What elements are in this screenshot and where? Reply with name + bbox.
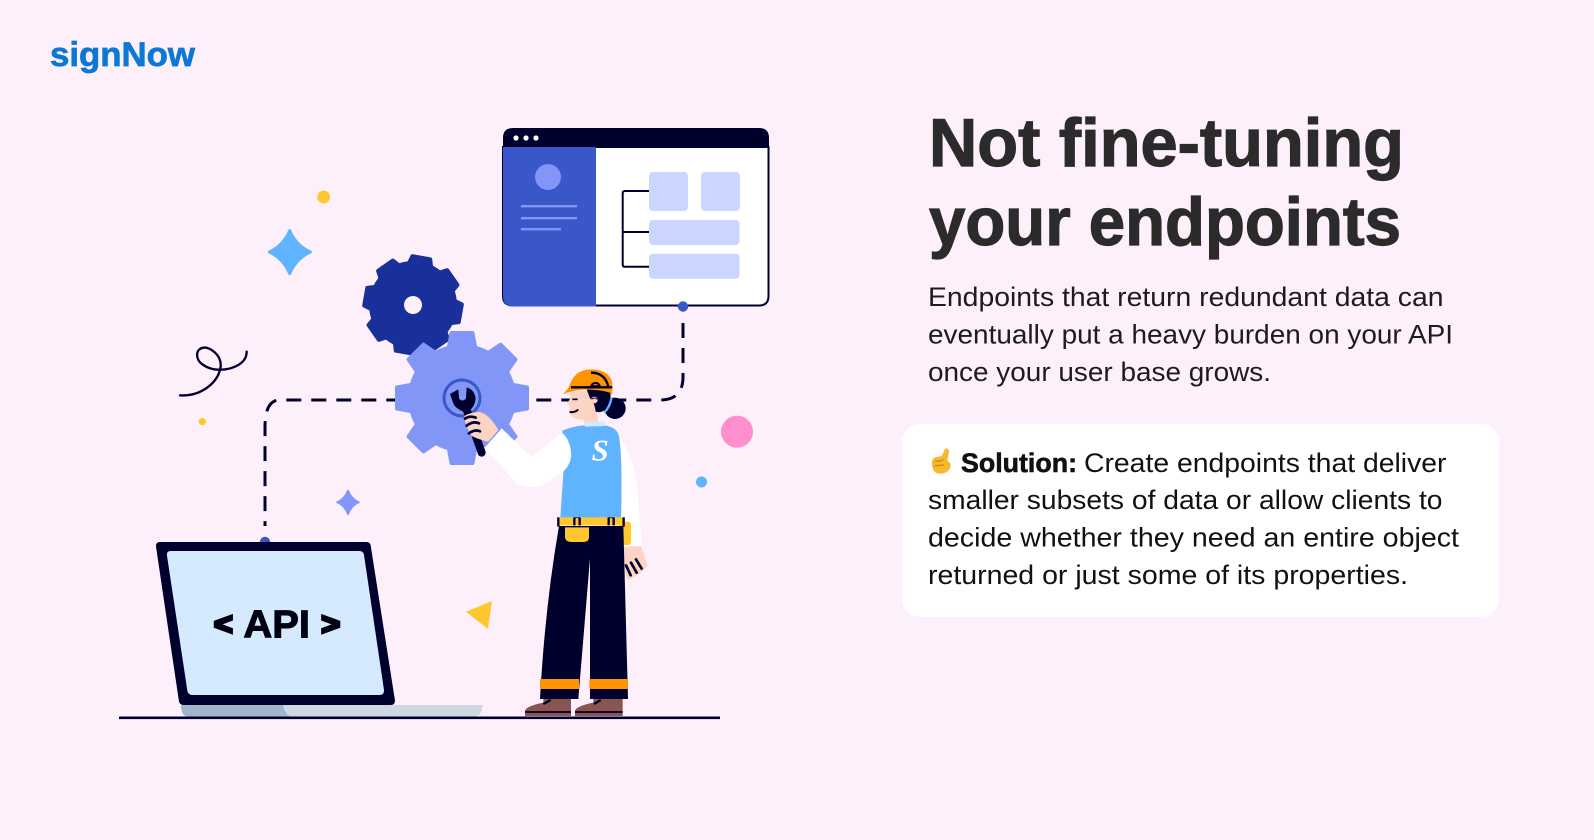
laptop screen label: < bbox=[214, 608, 233, 642]
title bbox=[929, 105, 1404, 260]
solution text: smaller subsets of data or allow clients to bbox=[928, 485, 1442, 515]
description text: once your user base grows. bbox=[928, 357, 1271, 387]
head with hard hat bbox=[562, 369, 626, 427]
side pouch bbox=[620, 522, 631, 545]
logo: signNow: signNow bbox=[50, 36, 195, 74]
solution text: returned or just some of its properties. bbox=[928, 560, 1408, 590]
vest bbox=[560, 425, 621, 517]
solution card bbox=[902, 424, 1499, 617]
solution text: decide whether they need an entire object bbox=[928, 522, 1460, 552]
title: Not fine-tuning bbox=[929, 105, 1404, 181]
yellow triangle bbox=[466, 601, 492, 629]
browser window bbox=[503, 128, 769, 306]
description text: Endpoints that return redundant data can bbox=[928, 282, 1444, 312]
blue dot bbox=[696, 476, 707, 488]
decorative shapes left bbox=[180, 191, 359, 514]
icon: pointing up emoji bbox=[932, 449, 951, 474]
boots bbox=[525, 699, 571, 716]
laptop screen label: > bbox=[321, 608, 340, 642]
solution text bbox=[928, 448, 1460, 590]
dashed connector line bbox=[265, 323, 683, 526]
light gear bbox=[397, 333, 527, 463]
description text bbox=[928, 282, 1453, 387]
description text: eventually put a heavy burden on your API bbox=[928, 320, 1453, 350]
back arm and hand bbox=[623, 546, 648, 580]
dark gear bbox=[357, 249, 469, 361]
laptop screen label: API bbox=[243, 602, 310, 646]
solution text: Create endpoints that deliver bbox=[1084, 448, 1447, 478]
vest letter: S bbox=[592, 434, 609, 468]
ground line bbox=[119, 716, 720, 719]
connector dot: browser bbox=[678, 301, 688, 312]
connector dot: laptop bbox=[260, 537, 270, 547]
front arm bbox=[485, 428, 571, 487]
title: your endpoints bbox=[929, 184, 1401, 260]
pink circle bbox=[721, 416, 753, 448]
laptop bbox=[156, 542, 482, 717]
belt bbox=[558, 517, 624, 525]
person bbox=[485, 425, 648, 716]
trousers bbox=[540, 526, 628, 699]
wrench and hand bbox=[450, 387, 498, 453]
solution text: Solution: bbox=[961, 448, 1077, 478]
